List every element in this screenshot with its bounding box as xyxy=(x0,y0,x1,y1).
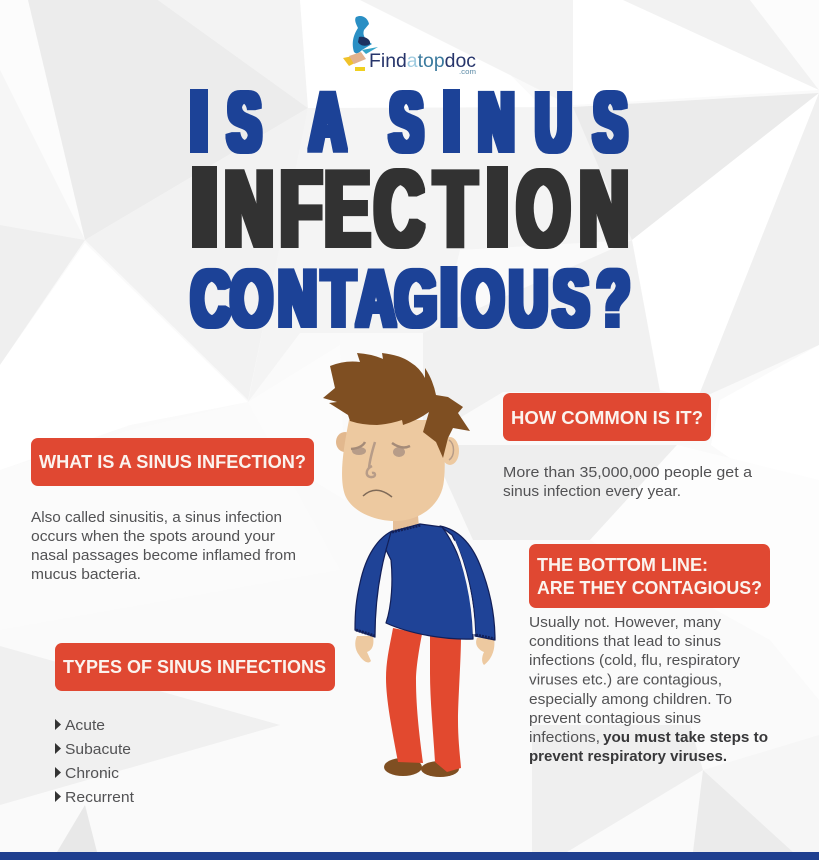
panel: how common xyxy=(503,393,753,500)
panel: what is a sinus infection xyxy=(31,438,314,583)
text block: sinus infection every year. xyxy=(503,483,681,500)
text block: especially among children. To xyxy=(529,691,732,708)
text block: nasal passages become inflamed from xyxy=(31,547,296,564)
torso xyxy=(386,524,473,639)
text block: infections (cold, flu, respiratory xyxy=(529,652,741,669)
title line: contagious: CONTAGIOUS? xyxy=(191,253,630,344)
icon: duck mascot xyxy=(343,16,378,71)
shoes xyxy=(384,758,459,777)
list xyxy=(55,717,135,806)
list: Recurrent xyxy=(65,789,135,806)
text block: conditions that lead to sinus xyxy=(529,633,721,650)
text block xyxy=(503,464,753,500)
ears xyxy=(336,432,459,465)
text block xyxy=(31,509,296,583)
heading: HOW COMMON IS IT? xyxy=(511,407,703,428)
list: Subacute xyxy=(65,741,131,758)
hands xyxy=(355,636,494,665)
text block: you must take steps to xyxy=(603,729,768,746)
panel: the bottom line xyxy=(529,544,770,765)
heading: WHAT IS A SINUS INFECTION? xyxy=(39,451,306,472)
text block: prevent respiratory viruses. xyxy=(529,748,727,765)
left sleeve xyxy=(355,531,392,637)
text block: viruses etc.) are contagious, xyxy=(529,672,722,688)
title line: is a sinus: IS A SINUS xyxy=(192,75,627,169)
text block: occurs when the spots around your xyxy=(31,528,275,545)
face xyxy=(342,420,445,521)
text block: Also called sinusitis, a sinus infection xyxy=(31,509,282,526)
heading xyxy=(503,393,711,441)
nose xyxy=(367,442,375,477)
heading: TYPES OF SINUS INFECTIONS xyxy=(63,656,326,677)
list: Chronic xyxy=(65,765,120,782)
sweater xyxy=(355,524,495,640)
logo xyxy=(343,16,476,76)
neck xyxy=(393,515,419,533)
logo: Findatopdoc xyxy=(369,50,476,72)
right sleeve xyxy=(440,526,495,640)
text block: Usually not. However, many xyxy=(529,614,722,631)
heading: THE BOTTOM LINE: xyxy=(537,554,708,575)
text block: prevent contagious sinus xyxy=(529,710,701,727)
text block: infections, xyxy=(529,729,600,746)
text block: More than 35,000,000 people get a xyxy=(503,464,753,481)
heading xyxy=(529,544,770,608)
title xyxy=(191,75,630,344)
mouth xyxy=(363,490,392,497)
list: Acute xyxy=(65,717,105,734)
hair xyxy=(323,353,470,458)
heading xyxy=(55,643,335,691)
logo: .com xyxy=(459,69,476,76)
footer bar xyxy=(0,852,819,860)
text block: mucus bacteria. xyxy=(31,566,141,583)
eyes and brows xyxy=(351,442,410,457)
heading: ARE THEY CONTAGIOUS? xyxy=(537,577,762,598)
heading xyxy=(31,438,314,486)
illustration: sick boy xyxy=(323,353,495,777)
title line: infection: INFECTION xyxy=(195,149,629,270)
text block xyxy=(529,614,768,765)
legs xyxy=(386,628,461,772)
panel: types of sinus infections xyxy=(55,643,335,806)
